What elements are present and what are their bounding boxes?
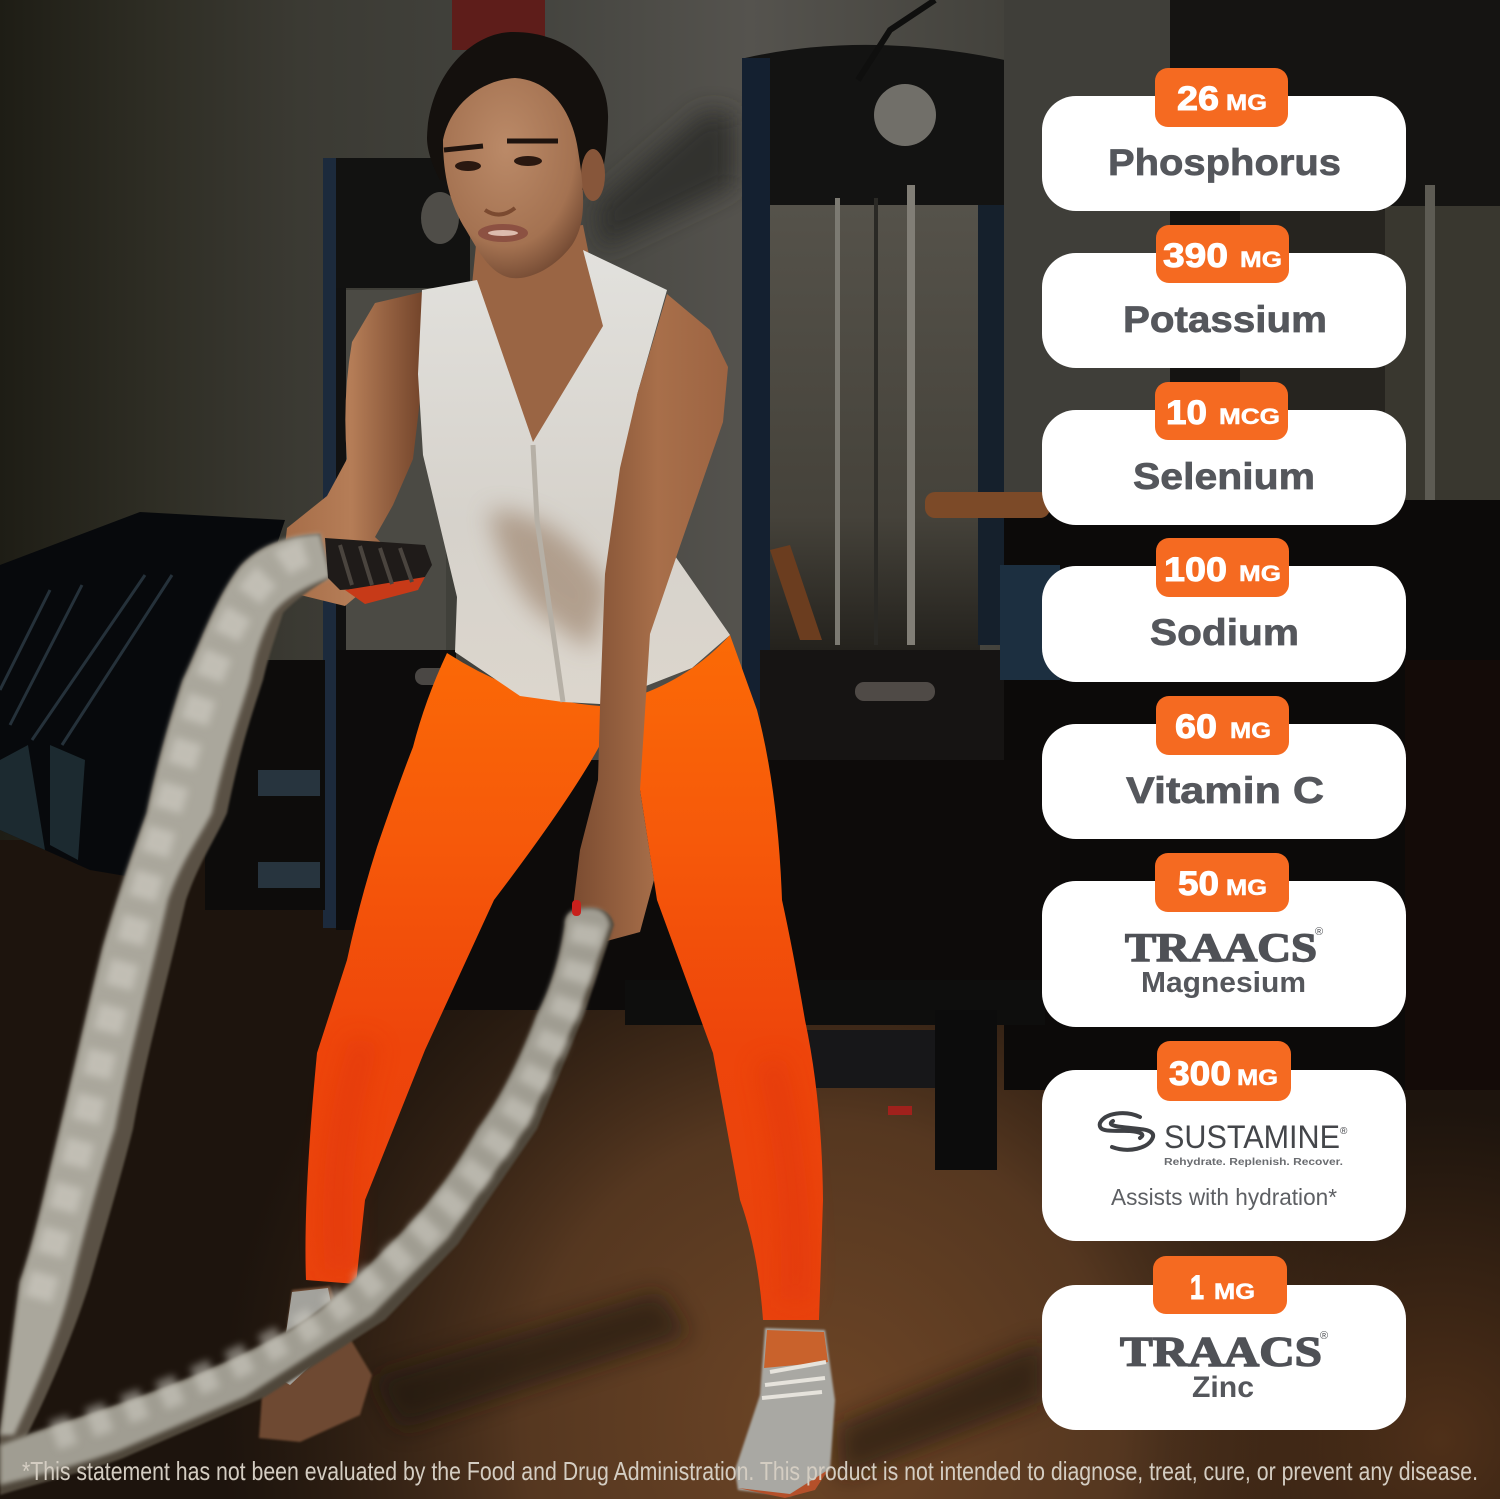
left shoe <box>259 1286 372 1442</box>
card: sodium <box>1042 538 1406 682</box>
card: selenium: MCG <box>1219 404 1280 429</box>
card: traacs zinc <box>1042 1256 1406 1430</box>
orange leggings <box>305 635 823 1320</box>
woman battling ropes <box>259 32 835 1498</box>
card: sustamine: 300 <box>1169 1055 1231 1093</box>
card: vitamin c <box>1042 696 1406 839</box>
card: sustamine: Rehydrate. Replenish. Recover. <box>1164 1157 1343 1168</box>
right arm <box>572 294 728 945</box>
tall weight machine <box>742 0 1014 848</box>
red fingernail <box>572 900 581 916</box>
card: traacs magnesium <box>1042 853 1406 1027</box>
card: traacs zinc: Zinc <box>1192 1371 1254 1404</box>
neck and chest <box>472 225 610 445</box>
card: phosphorus <box>1042 68 1406 211</box>
card: phosphorus: MG <box>1226 90 1267 115</box>
right battle rope <box>0 908 614 1495</box>
card: potassium: 390 <box>1163 237 1228 275</box>
card: sodium: 100 <box>1164 551 1227 589</box>
card: vitamin c: 60 <box>1175 708 1217 746</box>
card: traacs magnesium: TRAACS <box>1125 925 1317 970</box>
left arm <box>280 292 422 606</box>
card: sustamine: SUSTAMINE <box>1164 1119 1340 1155</box>
right shoe <box>735 1328 835 1498</box>
card: traacs zinc: ® <box>1320 1330 1328 1342</box>
card: traacs zinc: MG <box>1214 1279 1255 1304</box>
white sleeveless top <box>418 250 730 704</box>
icon: sustamine swirl logo <box>1100 1113 1153 1150</box>
card: potassium <box>1042 225 1406 368</box>
card: potassium: MG <box>1240 247 1282 272</box>
card: sustamine: Assists with hydration* <box>1111 1184 1337 1210</box>
card: sodium: Sodium <box>1150 612 1299 653</box>
card: selenium <box>1042 382 1406 525</box>
card: sustamine <box>1042 1041 1406 1241</box>
card: sodium: MG <box>1239 561 1281 586</box>
treadmills <box>0 512 325 910</box>
card: traacs zinc: TRAACS <box>1120 1330 1322 1376</box>
card: phosphorus: Phosphorus <box>1108 142 1341 183</box>
card: traacs magnesium: Magnesium <box>1141 967 1306 999</box>
card: selenium: Selenium <box>1133 456 1315 497</box>
card: traacs magnesium: MG <box>1226 875 1267 900</box>
card: sustamine: MG <box>1237 1065 1278 1090</box>
nutrient cards column <box>1042 68 1406 1430</box>
head <box>427 32 608 278</box>
card: vitamin c: MG <box>1230 718 1271 743</box>
floor cast shadows <box>372 1290 690 1430</box>
card: traacs zinc: 1 <box>1190 1269 1204 1307</box>
card: phosphorus: 26 <box>1177 80 1219 118</box>
card: sustamine: ® <box>1340 1126 1348 1137</box>
left battle rope with handle <box>0 534 432 1480</box>
card: traacs magnesium: ® <box>1315 926 1323 938</box>
card: selenium: 10 <box>1166 394 1207 432</box>
left weight machine <box>323 158 470 930</box>
right side equipment <box>440 0 1500 1170</box>
card: vitamin c: Vitamin C <box>1126 770 1324 811</box>
card: potassium: Potassium <box>1123 299 1327 340</box>
zipper <box>533 445 563 702</box>
rope handle <box>325 538 432 590</box>
card: traacs magnesium: 50 <box>1178 865 1219 903</box>
